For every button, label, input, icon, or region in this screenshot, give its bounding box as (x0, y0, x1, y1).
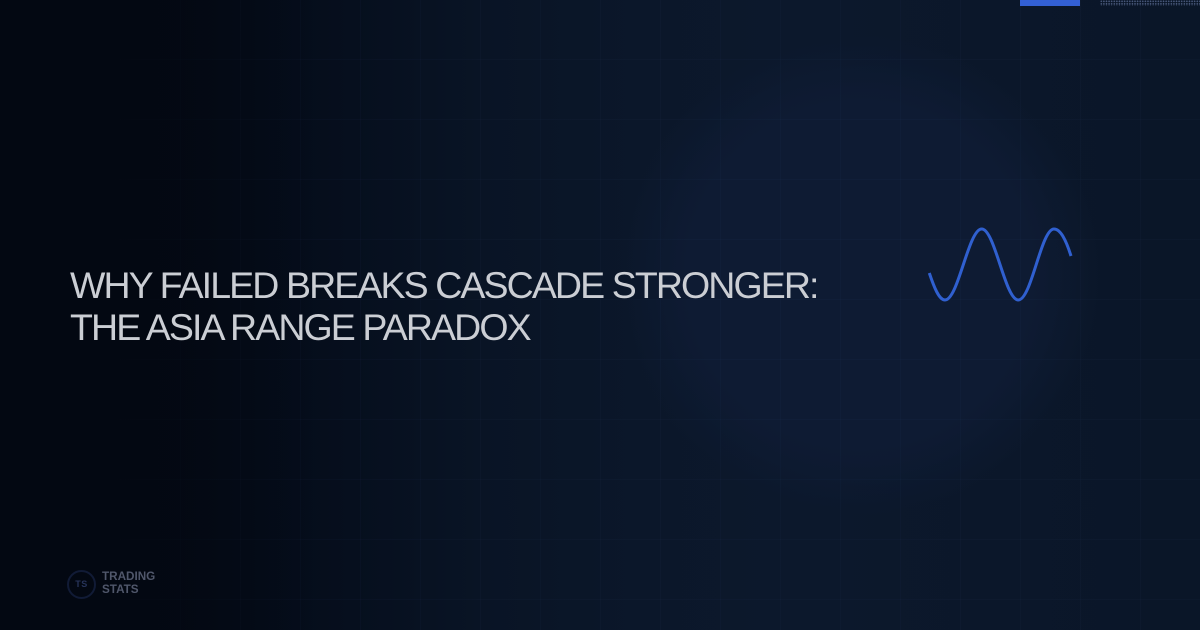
logo mark (67, 570, 96, 599)
logo wordmark (102, 570, 155, 596)
title: WHY FAILED BREAKS CASCADE STRONGER: (70, 264, 818, 306)
icon: sine wave (928, 228, 1072, 302)
title: THE ASIA RANGE PARADOX (70, 306, 530, 348)
logo wordmark: TRADING (102, 570, 155, 583)
logo (67, 570, 155, 599)
title (70, 264, 818, 348)
top dotted bar (1100, 0, 1200, 6)
logo mark: TS (75, 579, 88, 589)
top accent bar (1020, 0, 1080, 6)
logo wordmark: STATS (102, 582, 139, 596)
